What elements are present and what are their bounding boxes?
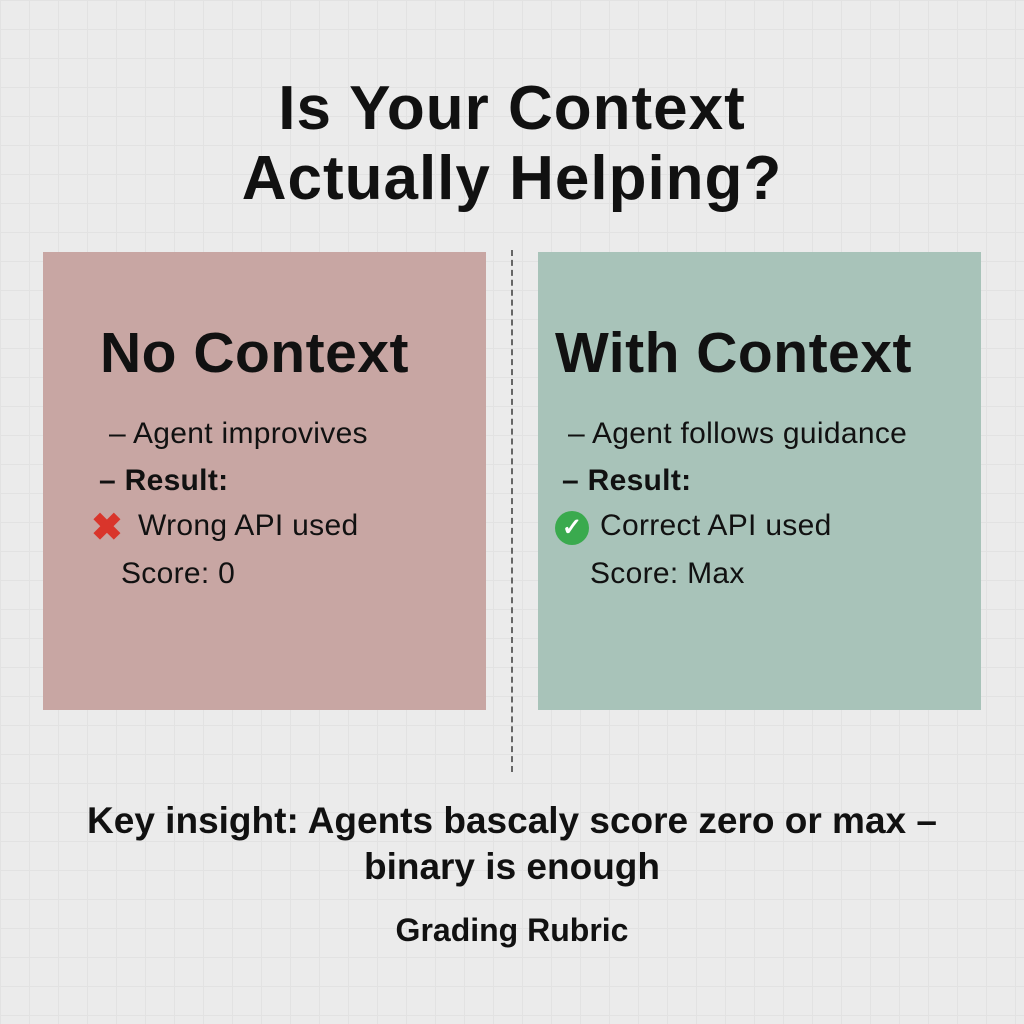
text: result: – Result: [99,464,228,497]
text: score max: Score: Max [590,557,745,590]
footer label: Grading Rubric [396,912,628,948]
heading: with context: With Context [555,321,912,385]
text: agent follows guidance: – Agent follows guidance [568,417,907,450]
text: wrong api used: Wrong API used [138,509,358,542]
heading: no context: No Context [100,321,409,385]
title: Is Your Context [278,74,746,143]
panel: no context [43,252,486,710]
key insight: Key insight: Agents bascaly score zero or max – [87,800,937,841]
icon: red cross: ✖ [91,507,123,549]
text: score 0: Score: 0 [121,557,235,590]
key insight: binary is enough [364,846,660,887]
text: correct api used: Correct API used [600,509,832,542]
text: result: – Result: [562,464,691,497]
divider: dashed line [511,250,513,772]
key insight [87,800,937,887]
icon: green check: ✓ [562,514,582,541]
icon: green check [555,511,589,545]
panel: with context [538,252,981,710]
title: Actually Helping? [242,144,782,213]
text: agent improvives: – Agent improvives [109,417,368,450]
title [242,74,782,213]
